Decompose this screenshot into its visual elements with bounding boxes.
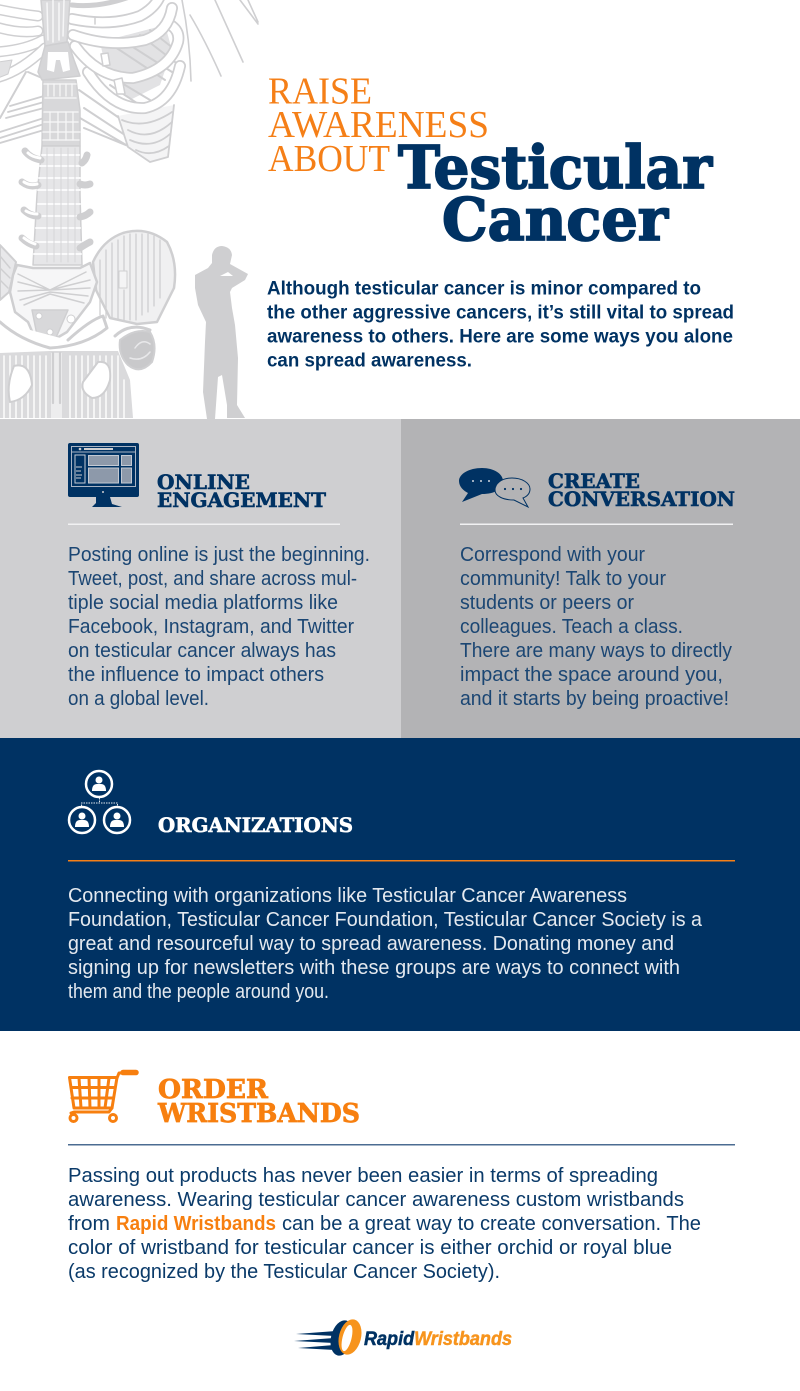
text: create conversation body: students or peers or [460, 592, 634, 614]
cartilage [118, 105, 174, 162]
left ribs [0, 9, 45, 78]
thoracic spine [42, 80, 80, 146]
text: organizations body: Foundation, Testicular Cancer Foundation, Testicular Cancer Society is a [68, 909, 703, 931]
text: order wristbands body: (as recognized by the Testicular Cancer Society). [68, 1261, 500, 1283]
title: testicular cancer: Cancer [442, 185, 669, 254]
icon: speed lines and ring [294, 1317, 365, 1358]
text: organizations body: great and resourceful way to spread awareness. Donating money and [68, 933, 674, 955]
heading: create conversation: CONVERSATION [548, 488, 735, 511]
skeleton illustration [0, 0, 258, 418]
xiphoid [38, 42, 80, 80]
text: order wristbands body [68, 1165, 701, 1283]
text: order wristbands body: Passing out products has never been easier in terms of spreading [68, 1165, 658, 1187]
text: online engagement body: on testicular cancer always has [68, 640, 336, 662]
hip socket [120, 331, 155, 369]
text: online engagement body [68, 544, 370, 710]
title: testicular cancer: Testicular [398, 133, 713, 202]
heading: create conversation [548, 470, 735, 511]
panel: online engagement [0, 419, 401, 738]
title: raise awareness about: RAISE [268, 70, 372, 112]
intro text: awareness to others. Here are some ways you alone [267, 326, 733, 348]
text: online engagement body: Facebook, Instagram, and Twitter [68, 616, 354, 638]
text: create conversation body: and it starts by being proactive! [460, 688, 729, 710]
intro text: Although testicular cancer is minor compared to [267, 278, 701, 300]
sternum [41, 0, 70, 46]
icon: desktop monitor [68, 443, 139, 507]
heading: online engagement [157, 471, 326, 512]
text: online engagement body: Posting online is just the beginning. [68, 544, 370, 566]
text: online engagement body: the influence to impact others [68, 664, 324, 686]
far lines at the top right [182, 0, 258, 81]
title: testicular cancer [398, 133, 713, 254]
text: organizations body: signing up for newsletters with these groups are ways to connect with [68, 957, 680, 979]
title: raise awareness about [268, 70, 489, 180]
text: order wristbands body: Rapid Wristbands [116, 1213, 276, 1235]
text: online engagement body: on a global level. [68, 688, 209, 710]
text: order wristbands body: awareness. Wearing testicular cancer awareness custom wristbands [68, 1189, 684, 1211]
text: organizations body [68, 885, 703, 1003]
heading: create conversation: CREATE [548, 470, 640, 493]
text: create conversation body: colleagues. Teach a class. [460, 616, 683, 638]
text: create conversation body [460, 544, 732, 710]
icon: speech bubbles [459, 468, 530, 507]
intro text [267, 278, 734, 372]
text: online engagement body: tiple social media platforms like [68, 592, 338, 614]
heading: order wristbands [157, 1075, 360, 1129]
left ilium [0, 245, 16, 300]
sacrum [10, 263, 97, 343]
title: raise awareness about: AWARENESS [268, 104, 489, 146]
logo: rapid wristbands [294, 1317, 512, 1358]
text: create conversation body: Correspond with your [460, 544, 645, 566]
title [268, 70, 713, 254]
section: order wristbands [68, 1072, 735, 1283]
text: organizations body: them and the people around you. [68, 981, 329, 1003]
pubis and ischium [0, 351, 133, 418]
panel: create conversation [401, 419, 800, 738]
right ribs, lower to upper [72, 0, 180, 108]
text: organizations body: Connecting with organizations like Testicular Cancer Awareness [68, 885, 627, 907]
heading: order wristbands: ORDER [158, 1075, 268, 1105]
text: create conversation body: There are many ways to directly [460, 640, 732, 662]
costal cartilage tags [101, 53, 125, 94]
text: order wristbands body: color of wristband for testicular cancer is either orchid or royal blue [68, 1237, 672, 1259]
shaded intercostal muscle [100, 25, 172, 100]
heading: organizations: ORGANIZATIONS [158, 814, 353, 837]
silhouette of man [195, 246, 248, 419]
icon: organization chart [69, 771, 130, 833]
text: online engagement body: Tweet, post, and share across mul- [68, 568, 357, 590]
heading: online engagement: ONLINE [157, 471, 250, 494]
text: order wristbands body: can be a great way to create conversation. The [282, 1213, 701, 1235]
text: create conversation body: impact the space around you, [460, 664, 723, 686]
icon: shopping cart [70, 1072, 136, 1122]
lumbar spine [33, 146, 82, 265]
intro text: can spread awareness. [267, 350, 472, 372]
transverse processes [22, 151, 90, 248]
panel: organizations [0, 738, 800, 1031]
heading: online engagement: ENGAGEMENT [157, 489, 326, 512]
right ilium [93, 231, 175, 324]
ala curve [0, 316, 107, 348]
heading: order wristbands: WRISTBANDS [157, 1099, 360, 1129]
intro text: the other aggressive cancers, it’s still vital to spread [267, 302, 734, 324]
title: raise awareness about: ABOUT [268, 138, 390, 180]
text: create conversation body: community! Talk to your [460, 568, 666, 590]
logo text: RapidWristbands [364, 1329, 512, 1350]
text: order wristbands body: from [68, 1213, 110, 1235]
